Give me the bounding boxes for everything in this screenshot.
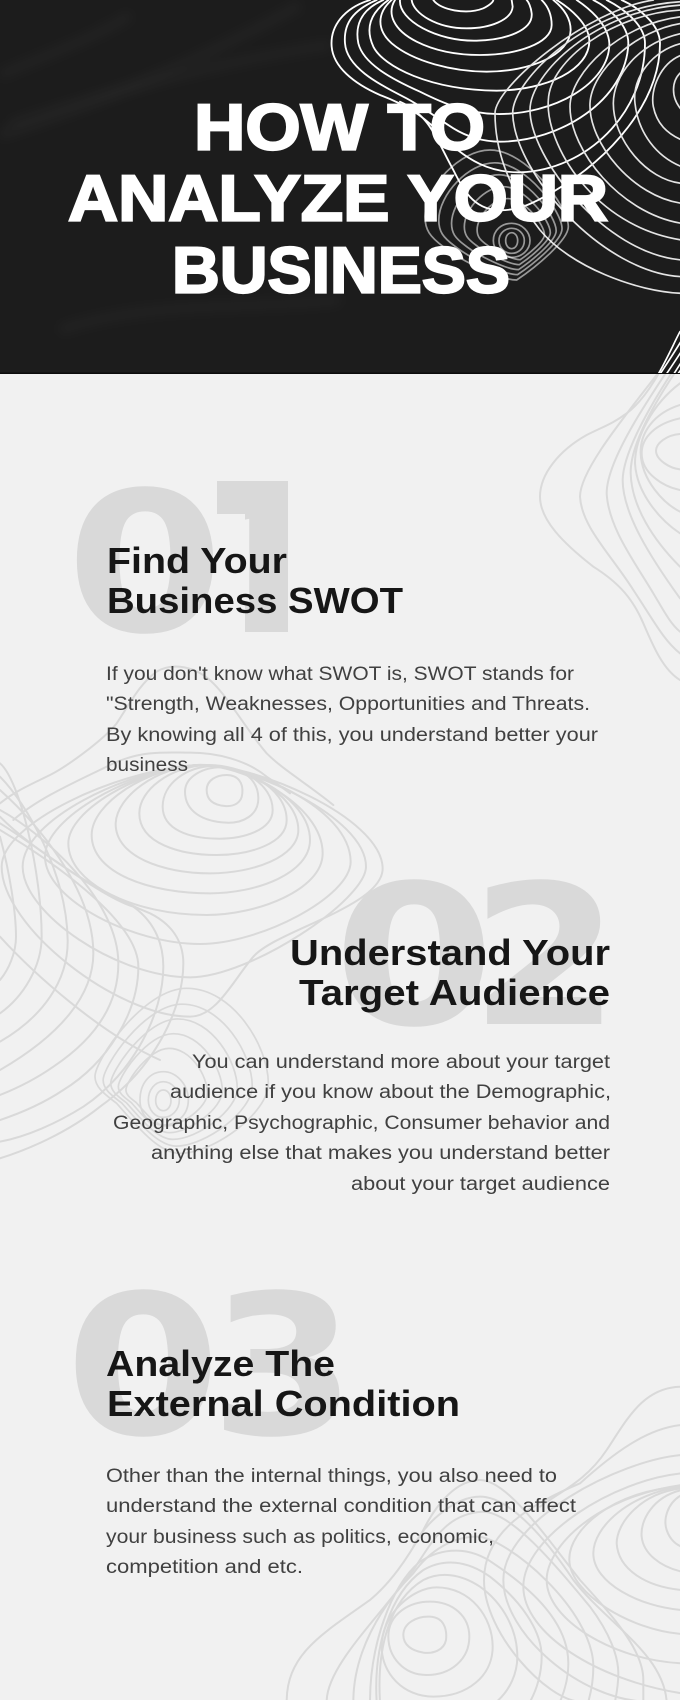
contour art: header white topographic lines: [332, 0, 680, 413]
section 03: heading: External Condition: [107, 1383, 460, 1424]
section 01: body text: "Strength, Weaknesses, Opportunities and Threats.: [106, 694, 590, 715]
contour art: middle left grey lines: [0, 667, 383, 1158]
section 02: number: [333, 843, 620, 1070]
section 02: heading: Understand Your: [290, 932, 610, 973]
panel: dark header background: [0, 0, 680, 374]
section 01: heading: Find Your: [107, 540, 287, 581]
section 02: body text: Geographic, Psychographic, Consumer behavior and: [113, 1113, 610, 1134]
section 01: number: [77, 481, 288, 634]
section 03: body text: [106, 1466, 577, 1578]
section 01: heading: Business SWOT: [107, 580, 403, 621]
contour art: bottom right grey lines: [287, 1387, 680, 1700]
section 02: heading: [290, 932, 610, 1013]
section 01: heading: [107, 540, 403, 621]
section 02: number: 2: [470, 843, 620, 1070]
section 03: body text: understand the external condition that can affect: [106, 1496, 577, 1517]
section 01: body text: If you don't know what SWOT is, SWOT stands for: [106, 664, 575, 685]
section 03: body text: Other than the internal things, you also need to: [106, 1466, 557, 1487]
panel: light body background: [0, 374, 680, 1700]
title: BUSINESS: [172, 234, 510, 306]
section 02: body text: about your target audience: [351, 1174, 610, 1195]
header dark lower edge: [0, 372, 680, 374]
title: ANALYZE YOUR: [68, 162, 608, 234]
section 02: heading: Target Audience: [299, 972, 610, 1013]
section 03: body text: competition and etc.: [106, 1557, 303, 1578]
title: HOW TO: [194, 90, 485, 164]
contour art: header corner lines: [658, 330, 680, 373]
section 02: body text: [113, 1052, 611, 1195]
section 03: number: 0: [65, 1253, 221, 1480]
contour art: top right grey lines: [539, 374, 680, 681]
section 02: body text: You can understand more about your target: [192, 1052, 611, 1073]
header textured streaks: [0, 5, 340, 330]
section 03: body text: your business such as politics, economic,: [106, 1527, 494, 1548]
title: [68, 90, 608, 306]
section 03: heading: Analyze The: [106, 1343, 335, 1384]
section 02: body text: audience if you know about the Demographic,: [170, 1082, 611, 1103]
section 03: number: 3: [210, 1253, 356, 1480]
section 01: number: 1: [198, 450, 334, 677]
section 03: heading: [106, 1343, 460, 1424]
section 01: body text: By knowing all 4 of this, you understand better your: [106, 725, 599, 746]
section 03: number: [65, 1253, 356, 1480]
section 02: number: 0: [333, 843, 495, 1070]
section 02: body text: anything else that makes you understand better: [151, 1143, 611, 1164]
section 01: body text: [106, 664, 599, 776]
section 01: number: 0: [66, 450, 224, 677]
section 01: body text: business: [106, 755, 188, 776]
